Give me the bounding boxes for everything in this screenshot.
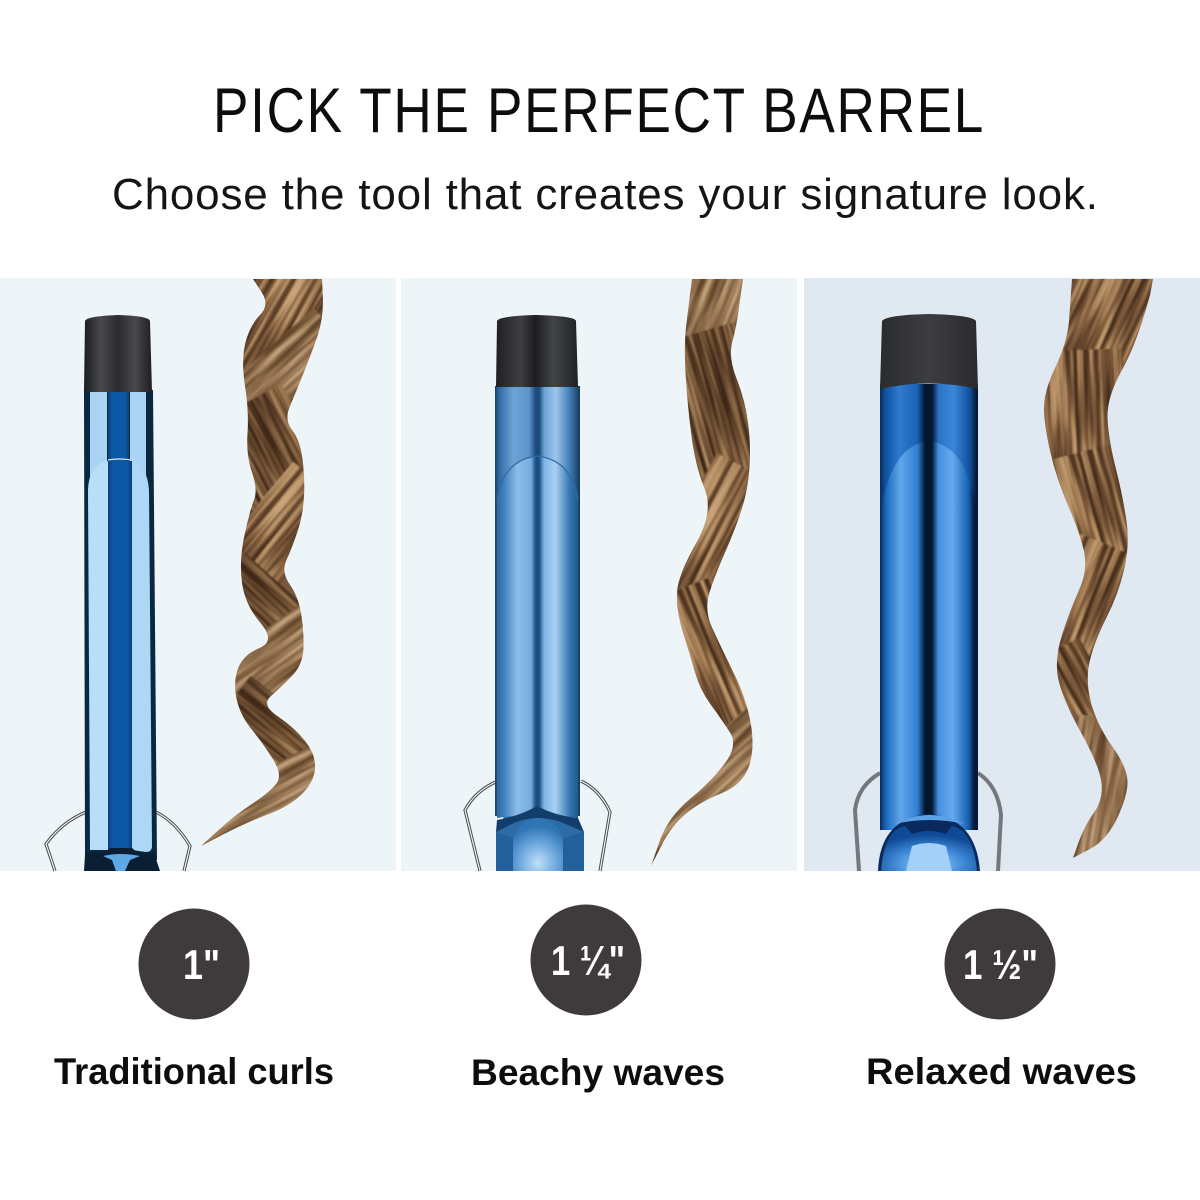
badge: 1 1/2 inch: 1 ½"	[963, 941, 1038, 988]
hair: relaxed wave	[1044, 279, 1153, 858]
badge: 1 1/4 inch: 1 ¼"	[551, 937, 625, 984]
curling iron barrel	[495, 386, 584, 871]
badge: 1 inch	[138, 908, 250, 1020]
hair: traditional curl	[201, 279, 323, 846]
label: relaxed waves: Relaxed waves	[866, 1051, 1137, 1092]
panel: 1 inch barrel	[0, 278, 396, 872]
panel: 1 1/2 inch barrel	[804, 228, 1200, 886]
badge: 1 1/2 inch	[944, 908, 1056, 1020]
curling iron barrel	[84, 390, 160, 871]
panel background	[401, 278, 797, 871]
badge: 1 1/4 inch	[530, 904, 642, 1016]
clip wire	[855, 773, 1001, 871]
barrel cap	[84, 315, 152, 392]
badge: 1 inch: 1"	[183, 941, 220, 988]
clip wire	[46, 812, 190, 871]
subtitle: Choose the tool that creates your signature look.	[112, 170, 1098, 219]
label: beachy waves: Beachy waves	[471, 1052, 725, 1093]
panel: 1 1/4 inch barrel	[401, 278, 797, 872]
panel background	[0, 278, 396, 871]
curling iron barrel	[878, 384, 980, 871]
label: traditional curls: Traditional curls	[54, 1051, 334, 1092]
title: PICK THE PERFECT BARREL	[213, 76, 985, 146]
barrel cap	[496, 315, 578, 387]
hair: beachy wave	[651, 279, 752, 866]
barrel cap	[880, 314, 978, 389]
clip wire	[465, 781, 610, 871]
panel background	[804, 278, 1200, 871]
